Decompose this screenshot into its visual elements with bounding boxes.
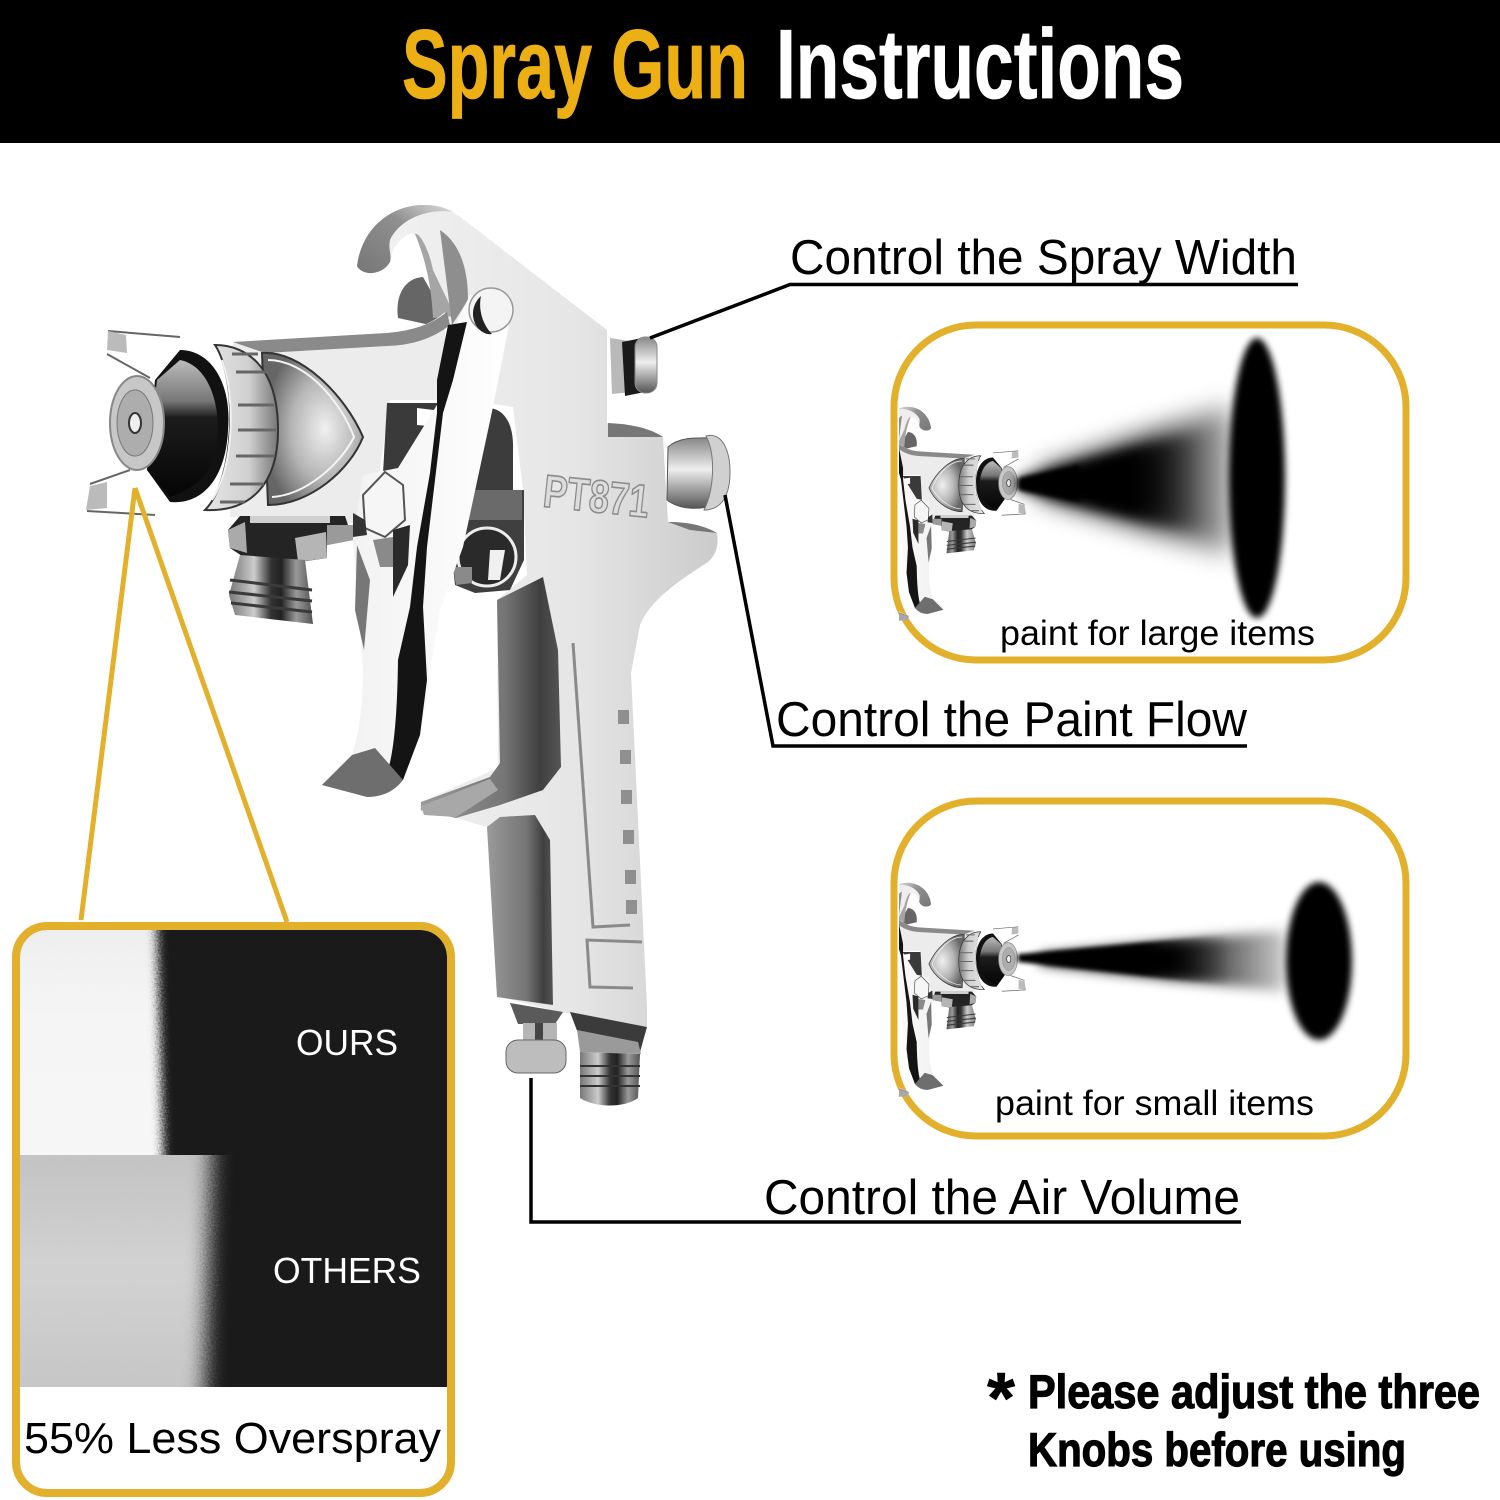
- caption: paint for large items: [1000, 614, 1315, 653]
- callout: paint flow: [725, 495, 1248, 747]
- label: ours: OURS: [296, 1022, 398, 1063]
- title: Spray Gun: Spray Gun: [402, 9, 748, 119]
- small gun: [899, 882, 1026, 1097]
- sample: others: [20, 1155, 229, 1387]
- white caption strip: [20, 1387, 447, 1497]
- small gun: [899, 406, 1026, 621]
- note: adjust knobs: [987, 1359, 1480, 1476]
- sample: ours: [20, 930, 174, 1155]
- title bar: [0, 0, 1500, 143]
- callout: spray width: [650, 231, 1298, 338]
- connector lines to comparison panel: [81, 488, 287, 922]
- title: Instructions: Instructions: [776, 9, 1184, 119]
- panel: small items: [890, 798, 1410, 1140]
- label: others: OTHERS: [273, 1250, 421, 1291]
- callout: spray width: Control the Spray Width: [790, 231, 1297, 285]
- callout: air volume: Control the Air Volume: [764, 1171, 1240, 1225]
- note: adjust knobs: Knobs before using: [1028, 1423, 1406, 1476]
- caption: less overspray: 55% Less Overspray: [24, 1414, 441, 1463]
- callout: paint flow: Control the Paint Flow: [776, 693, 1248, 747]
- illustration: spray gun: [86, 205, 730, 1106]
- spray pattern: [1286, 882, 1352, 1040]
- note: adjust knobs: *: [987, 1359, 1015, 1439]
- spray cone: [1018, 930, 1285, 992]
- panel: large items: [890, 322, 1410, 664]
- callout: air volume: [531, 1078, 1241, 1225]
- panel: overspray comparison: [0, 900, 451, 1497]
- spray cone: [1018, 405, 1232, 555]
- spray pattern: [1229, 338, 1285, 618]
- caption: paint for small items: [995, 1084, 1314, 1123]
